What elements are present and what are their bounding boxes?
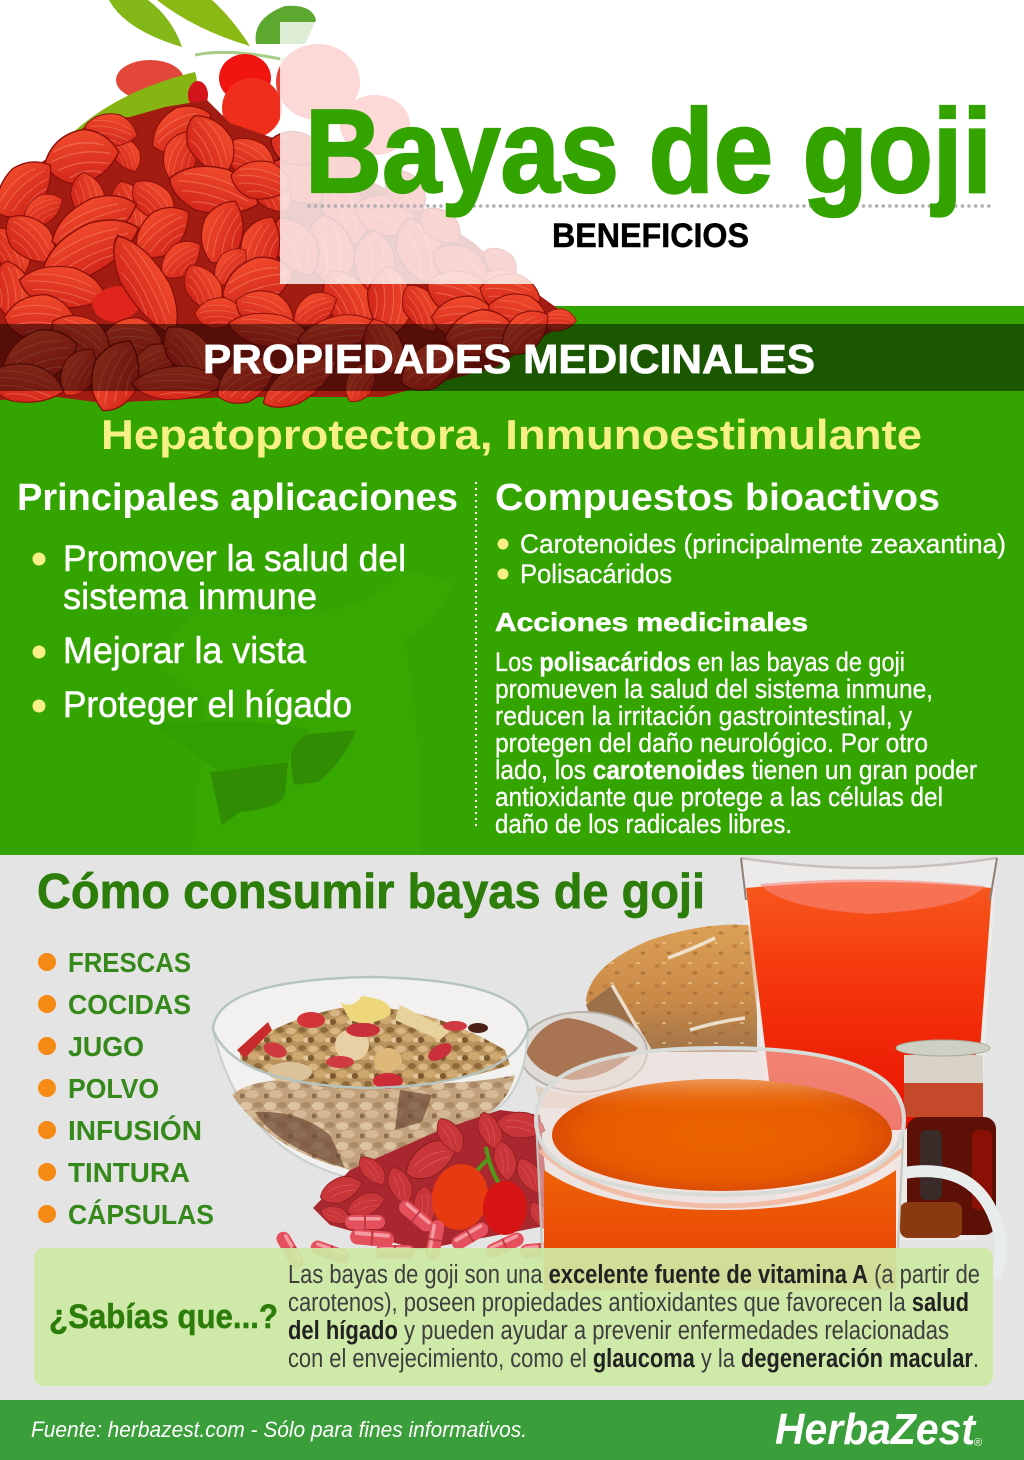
text: medicinal actions: lado, los carotenoides tienen un gran poder <box>495 755 977 785</box>
list: consumption forms: INFUSIÓN <box>68 1115 202 1146</box>
logo: HerbaZest: HerbaZest <box>775 1405 977 1454</box>
illustration: granola bowl <box>213 977 528 1178</box>
list: applications <box>32 538 406 725</box>
heading: medicinal actions: Acciones medicinales <box>495 607 808 637</box>
text: medicinal actions: Los polisacáridos en las bayas de goji <box>495 647 905 677</box>
callout: did you know <box>34 1248 993 1386</box>
list: applications: Mejorar la vista <box>63 630 306 671</box>
text: medicinal actions: reducen la irritación gastrointestinal, y <box>495 701 912 731</box>
list: consumption forms: POLVO <box>68 1073 159 1104</box>
subheading: properties: Hepatoprotectora, Inmunoestimulante <box>101 411 922 458</box>
text: medicinal actions: antioxidante que protege a las células del <box>495 782 943 812</box>
illustration: powder dish <box>519 1012 647 1108</box>
illustration: bread loaf <box>586 925 757 1052</box>
illustration: dried berries, fresh goji and capsules <box>274 1108 561 1271</box>
column divider <box>475 482 477 830</box>
callout text <box>288 1261 980 1373</box>
list: applications: sistema inmune <box>63 576 317 617</box>
list: compounds: Carotenoides (principalmente zeaxantina) <box>520 529 1006 559</box>
callout text: Las bayas de goji son una excelente fuente de vitamina A (a partir de <box>288 1261 980 1289</box>
consumption section background <box>0 855 1024 1400</box>
heading: compounds: Compuestos bioactivos <box>495 477 940 519</box>
banner: medicinal properties <box>0 324 1024 391</box>
source note: Fuente: herbazest.com - Sólo para fines informativos. <box>31 1417 527 1442</box>
panel: principal applications <box>17 477 458 725</box>
footer <box>0 1400 1024 1460</box>
list: consumption forms: TINTURA <box>68 1157 190 1188</box>
text: medicinal actions <box>495 647 977 839</box>
text: medicinal actions: daño de los radicales libres. <box>495 809 792 839</box>
illustration: pile of dried goji berries <box>0 95 576 419</box>
list: consumption forms: FRESCAS <box>68 947 191 978</box>
text: medicinal actions: promueven la salud del sistema inmune, <box>495 674 933 704</box>
callout text: carotenos), poseen propiedades antioxidantes que favorecen la salud <box>288 1289 969 1317</box>
green medicinal section background <box>0 306 1024 855</box>
list: consumption forms <box>38 947 214 1230</box>
heading: applications: Principales aplicaciones <box>17 477 458 519</box>
list: compounds: Polisacáridos <box>520 559 672 589</box>
heading: how to consume: Cómo consumir bayas de goji <box>37 865 705 919</box>
illustration: juice glass <box>741 858 997 1240</box>
list: compounds <box>498 529 1006 589</box>
callout text: del hígado y pueden ayudar a prevenir enfermedades relacionadas <box>288 1317 949 1345</box>
list: applications: Promover la salud del <box>63 538 406 579</box>
panel: bioactive compounds <box>495 477 1006 839</box>
capsules <box>274 1198 561 1271</box>
list: consumption forms: JUGO <box>68 1031 144 1062</box>
list: applications: Proteger el hígado <box>63 684 352 725</box>
list: consumption forms: CÁPSULAS <box>68 1199 214 1230</box>
illustration: cup of tea <box>536 1048 1001 1290</box>
title backing panel <box>280 22 1024 284</box>
illustration: woman holding liver silhouette <box>150 570 452 855</box>
callout text: con el envejecimiento, como el glaucoma y la degeneración macular. <box>288 1345 979 1373</box>
illustration: goji leaves and fresh fruit <box>52 0 410 175</box>
fresh goji fruits <box>427 1147 527 1235</box>
subtitle: BENEFICIOS <box>552 217 749 255</box>
callout heading: ¿Sabías que...? <box>49 1298 278 1336</box>
banner: medicinal properties: PROPIEDADES MEDICINALES <box>203 336 815 382</box>
dotted title divider <box>309 204 994 208</box>
illustration: tincture bottle <box>896 1040 996 1238</box>
logo: HerbaZest: ® <box>974 1437 982 1449</box>
text: medicinal actions: protegen del daño neurológico. Por otro <box>495 728 928 758</box>
list: consumption forms: COCIDAS <box>68 989 191 1020</box>
